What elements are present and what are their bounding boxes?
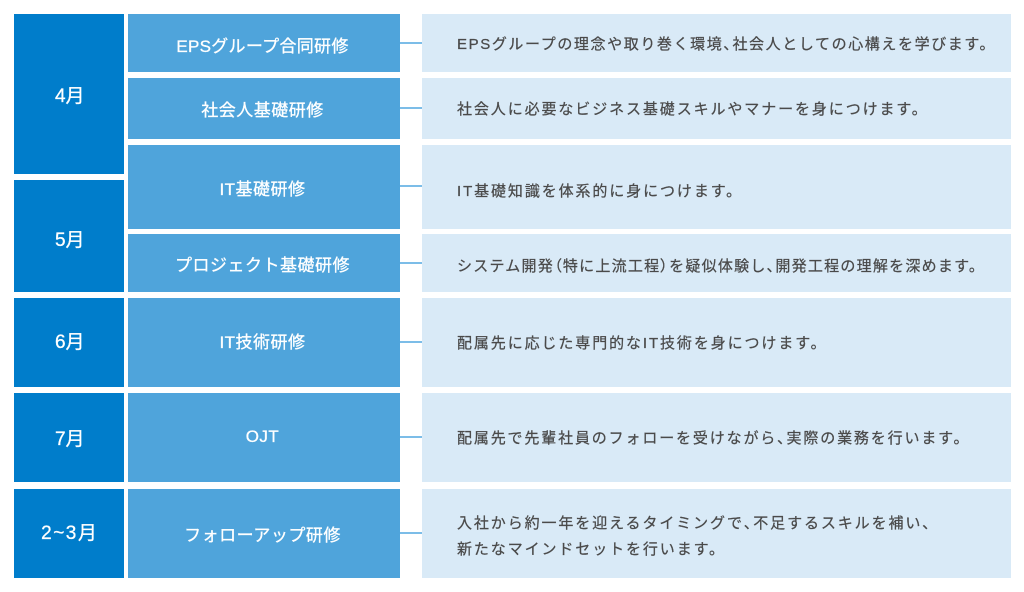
training: IT fundamentals <box>128 144 400 229</box>
training: IT technology <box>128 298 400 387</box>
description: IT fundamentals: IT基礎知識を体系的に身につけます。 <box>457 183 743 200</box>
description: OJT: 配属先で先輩社員のフォローを受けながら、実際の業務を行います。 <box>457 430 970 447</box>
description: business fundamentals <box>422 78 1011 139</box>
month: July: 7月 <box>55 429 85 450</box>
training: project fundamentals <box>128 234 400 292</box>
training: business fundamentals: 社会人基礎研修 <box>201 101 324 120</box>
training: business fundamentals <box>128 78 400 139</box>
description: IT fundamentals <box>422 144 1011 229</box>
description: EPS group joint training <box>422 14 1011 72</box>
connector 3 <box>400 185 422 187</box>
description: IT technology <box>422 298 1011 387</box>
description: IT technology: 配属先に応じた専門的なIT技術を身につけます。 <box>457 335 828 352</box>
month: February to March: 2~3月 <box>41 523 98 544</box>
training: IT fundamentals: IT基礎研修 <box>219 180 306 198</box>
training: follow-up: フォローアップ研修 <box>184 526 341 545</box>
training: EPS group joint training: EPSグループ合同研修 <box>176 37 349 56</box>
month: April <box>14 14 124 174</box>
month: May: 5月 <box>55 230 85 251</box>
connector 2 <box>400 107 422 109</box>
description: EPS group joint training: EPSグループの理念や取り巻く環境、社会人としての心構えを学びます。 <box>457 36 996 53</box>
description: project fundamentals <box>422 234 1011 292</box>
month: April: 4月 <box>55 86 85 107</box>
month: June: 6月 <box>55 332 85 353</box>
description: follow-up: 入社から約一年を迎えるタイミングで、不足するスキルを補い、 <box>457 515 932 532</box>
training: OJT: OJT <box>246 427 279 446</box>
connector 6 <box>400 436 422 438</box>
connector 7 <box>400 532 422 534</box>
description: follow-up <box>422 489 1011 578</box>
connector 4 <box>400 262 422 264</box>
training: follow-up <box>128 489 400 578</box>
month: July <box>14 393 124 482</box>
month: June <box>14 298 124 387</box>
training: project fundamentals: プロジェクト基礎研修 <box>175 256 350 275</box>
description: follow-up: 新たなマインドセットを行います。 <box>457 541 726 558</box>
description: project fundamentals: システム開発（特に上流工程）を疑似体験し、開発工程の理解を深めます。 <box>457 258 985 275</box>
training: EPS group joint training <box>128 14 400 72</box>
connector 5 <box>400 341 422 343</box>
training: OJT <box>128 393 400 482</box>
training: IT technology: IT技術研修 <box>219 333 306 352</box>
connector 1 <box>400 42 422 44</box>
description: OJT <box>422 393 1011 482</box>
month: February to March <box>14 489 124 578</box>
description: business fundamentals: 社会人に必要なビジネス基礎スキルやマナーを身につけます。 <box>457 101 929 118</box>
month: May <box>14 180 124 292</box>
